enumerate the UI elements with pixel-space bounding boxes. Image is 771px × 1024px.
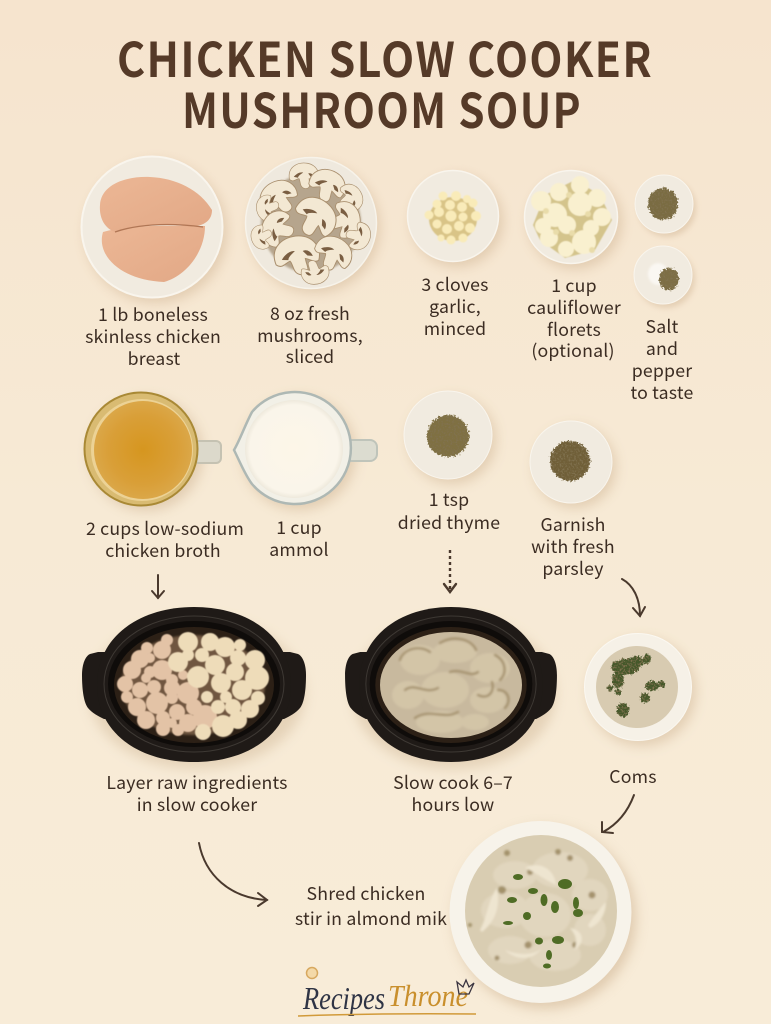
- label: garlic: 3 cloves: [421, 271, 489, 297]
- label: broth: 2 cups low-sodium: [86, 515, 244, 541]
- icon: chef hat: [306, 968, 318, 978]
- arrow: curve to shred step: [199, 843, 267, 906]
- label: parsley: parsley: [542, 555, 604, 581]
- label: garlic: [421, 271, 489, 341]
- icon: cooker with soup: [345, 607, 557, 769]
- label: shred chicken: Shred chicken: [307, 880, 425, 906]
- label: salt and pepper: to taste: [631, 379, 693, 405]
- label: layer: in slow cooker: [137, 791, 257, 817]
- icon: mushroom plate: [246, 158, 380, 293]
- label: parsley: with fresh: [531, 533, 615, 559]
- label: thyme: dried thyme: [398, 509, 500, 535]
- ingredient: garlic: [408, 170, 503, 341]
- slow cooker: cooked soup: [345, 607, 557, 817]
- ingredient: chicken breast: [82, 156, 227, 371]
- ingredient: parsley: [530, 421, 616, 581]
- label: layer: Layer raw ingredients: [106, 769, 288, 795]
- icon: pepper dish: [635, 175, 696, 237]
- icon: cauliflower plate: [524, 170, 622, 269]
- label: mushrooms: [257, 300, 363, 369]
- label: slow cook: hours low: [412, 791, 494, 817]
- label: broth: chicken broth: [105, 537, 221, 563]
- label: shred chicken: stir in almond mik: [295, 905, 447, 931]
- icon: crown: [457, 980, 474, 994]
- label: slow cook: Slow cook 6–7: [393, 769, 513, 795]
- icon: chicken plate: [82, 156, 227, 303]
- title: MUSHROOM SOUP: [182, 72, 582, 142]
- small soup bowl: [584, 634, 696, 746]
- label: mushrooms: mushrooms,: [257, 322, 363, 348]
- logo underline: [298, 1014, 476, 1016]
- label: mushrooms: 8 oz fresh: [270, 300, 350, 326]
- label: parsley: Garnish: [540, 511, 606, 537]
- label: mushrooms: sliced: [286, 343, 334, 369]
- label: cauliflower: florets: [547, 316, 601, 342]
- label: coms: Coms: [609, 763, 657, 789]
- ingredient: salt and pepper: [631, 175, 696, 405]
- label: salt and pepper: [631, 313, 693, 405]
- arrow: coms to big bowl: [602, 795, 634, 833]
- label: broth: [86, 515, 244, 563]
- label: thyme: [398, 486, 500, 535]
- icon: broth cup: [84, 392, 221, 511]
- label: chicken: skinless chicken: [85, 323, 221, 349]
- label: milk: [269, 514, 329, 562]
- arrow: broth to cooker: [152, 575, 164, 598]
- ingredient: mushrooms: [246, 158, 380, 369]
- label: salt and pepper: Salt: [646, 313, 679, 339]
- icon: cooker with raw ingredients: [82, 607, 306, 769]
- label: milk: 1 cup: [276, 514, 322, 540]
- icon: milk cup: [234, 392, 377, 510]
- label: cauliflower: 1 cup: [551, 272, 597, 298]
- label: milk: ammol: [269, 536, 329, 562]
- label: shred chicken: [295, 880, 447, 931]
- ingredient: broth: [84, 392, 244, 563]
- logo: [298, 968, 476, 1016]
- label: layer: [106, 769, 288, 817]
- label: chicken: breast: [128, 345, 181, 371]
- label: cauliflower: (optional): [531, 337, 615, 363]
- logo wordmark: Throne: Throne: [388, 978, 468, 1013]
- label: chicken: [85, 301, 221, 371]
- arrow: parsley to bowl: [622, 579, 645, 616]
- label: salt and pepper: and: [646, 335, 678, 361]
- title: [117, 21, 653, 142]
- ingredient: cauliflower: [524, 170, 622, 363]
- finished soup bowl: [450, 821, 636, 1009]
- logo wordmark: Recipes: Recipes: [302, 980, 385, 1016]
- icon: garlic plate: [408, 170, 503, 267]
- label: chicken: 1 lb boneless: [98, 301, 208, 327]
- label: thyme: 1 tsp: [429, 486, 469, 512]
- label: slow cook: [393, 769, 513, 817]
- label: garlic: garlic,: [429, 293, 481, 319]
- icon: thyme dish: [404, 391, 496, 484]
- icon: parsley dish: [530, 421, 616, 508]
- label: cauliflower: [527, 272, 621, 363]
- ingredient: thyme: [398, 391, 500, 535]
- slow cooker: raw ingredients: [82, 607, 306, 817]
- ingredient: milk: [234, 392, 377, 562]
- label: cauliflower: cauliflower: [527, 294, 621, 320]
- arrow: thyme dotted: [444, 550, 456, 592]
- icon: salt dish: [634, 246, 695, 308]
- label: garlic: minced: [424, 315, 486, 341]
- label: parsley: [531, 511, 615, 581]
- title: CHICKEN SLOW COOKER: [117, 21, 653, 91]
- label: salt and pepper: pepper: [632, 357, 692, 383]
